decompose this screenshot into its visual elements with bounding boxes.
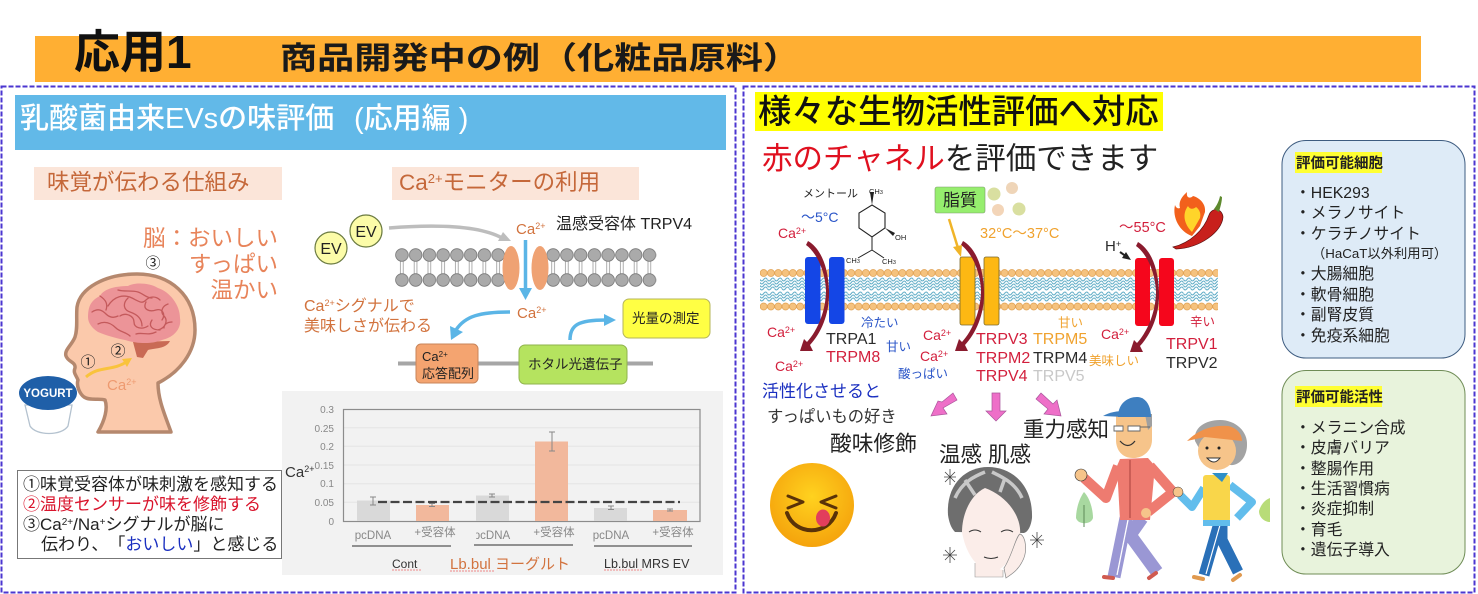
icon: EV particles <box>315 215 382 264</box>
cell list: ・メラノサイト <box>1295 205 1405 222</box>
chart: Ca response <box>282 391 723 589</box>
cold channel labels: 2+ <box>796 226 806 236</box>
icon: EV particles: EV <box>355 224 377 241</box>
subheading: Ca monitor: モニターの利用 <box>443 170 600 195</box>
title banner <box>35 26 1421 82</box>
receptor label: 温感受容体 TRPV4 <box>556 215 692 233</box>
icon: walking elderly couple <box>1075 397 1270 580</box>
hot channel labels: ～55°C <box>1119 220 1166 236</box>
box: evaluable cells <box>1282 140 1465 358</box>
chart group labels <box>392 556 690 572</box>
hot channel labels: Ca <box>1101 326 1119 342</box>
trees <box>1076 492 1270 527</box>
signal text: 2+ <box>324 298 335 308</box>
panel heading <box>15 95 726 150</box>
arrow: lipid to channel <box>949 219 962 257</box>
chart axis ticks: 0.3 <box>320 405 334 416</box>
warm channel labels: 32°C～37°C <box>980 226 1059 242</box>
warm channel labels: Ca <box>920 348 938 364</box>
text box: mechanism steps: /Na <box>73 515 100 534</box>
icon: head with brain <box>66 274 195 432</box>
Ca2+ above channel: Ca <box>516 221 535 238</box>
icon: menthol structure <box>846 187 906 266</box>
subheading: taste mechanism <box>34 167 282 200</box>
activation text: 活性化させると <box>762 382 881 401</box>
hot channel labels: H <box>1105 238 1116 255</box>
brain taste words: すっぱい <box>189 252 278 277</box>
cell list: ・大腸細胞 <box>1295 265 1374 283</box>
box: evaluable activities <box>1282 370 1465 574</box>
hot channel labels: TRPV2 <box>1166 355 1218 372</box>
cold channel labels: Ca <box>775 358 793 374</box>
activation text: 酸味修飾 <box>830 431 917 456</box>
box: response element: 応答配列 <box>422 366 474 381</box>
cell list: ・HEK293 <box>1295 185 1370 202</box>
icon: menthol structure: CH3 <box>869 187 883 196</box>
chart axis ticks: 0.1 <box>320 479 334 490</box>
text box: mechanism steps: シグナルが脳に <box>105 515 224 534</box>
cell list: ・ケラチノサイト <box>1295 225 1421 243</box>
warm channel labels <box>898 226 1087 385</box>
numbered markers on head <box>80 255 161 371</box>
lipid callout: 脂質 <box>943 191 977 210</box>
cold channel labels <box>767 188 911 374</box>
lipid callout <box>935 182 1026 216</box>
cold channel labels: メントール <box>803 188 858 200</box>
chart category labels: pcDNA <box>593 530 630 542</box>
activity list: ・整腸作用 <box>1295 460 1374 478</box>
box title: 評価可能活性 <box>1296 388 1383 406</box>
box: response element: Ca <box>422 349 439 364</box>
box: response element <box>416 344 478 383</box>
gene construct <box>398 344 653 384</box>
signal text: Ca <box>304 298 324 315</box>
icon: menthol structure: CH3 <box>882 257 896 266</box>
text box: mechanism steps: ②温度センサーが味を修飾する <box>23 495 261 514</box>
chart group labels: Lb.bul MRS EV <box>604 557 690 571</box>
text box: mechanism steps: ①味覚受容体が味刺激を感知する <box>23 475 278 494</box>
activation text: すっぱいもの好き <box>767 408 897 426</box>
cold channel labels: TRPA1 <box>826 331 876 348</box>
chart axis ticks <box>315 405 334 528</box>
gravity label: 重力感知 <box>1023 418 1109 442</box>
subheading: taste mechanism: 味覚が伝わる仕組み <box>47 170 250 195</box>
title: application number: 応用1 <box>74 26 192 78</box>
signal text: 美味しさが伝わる <box>304 317 432 335</box>
chart category labels: +受容体 <box>533 525 575 539</box>
cold channel labels: Ca <box>778 225 796 241</box>
activity list: ・炎症抑制 <box>1295 500 1374 518</box>
activity list: ・育毛 <box>1295 521 1343 539</box>
box title: 評価可能細胞 <box>1296 154 1383 172</box>
arrow: to luminescence <box>570 314 616 340</box>
subheading: Ca monitor: Ca <box>399 170 428 195</box>
hot channel labels: 辛い <box>1190 315 1215 329</box>
hot channel labels: TRPV1 <box>1166 336 1218 353</box>
cell list <box>1295 185 1447 345</box>
warm channel labels: TRPM5 <box>1033 331 1087 348</box>
activity list: ・生活習慣病 <box>1295 480 1390 498</box>
cold channel labels: 2+ <box>793 359 803 369</box>
cell list: ・副腎皮質 <box>1295 306 1374 324</box>
numbered markers on head: ① <box>80 354 96 371</box>
brain taste words: 脳：おいしい <box>143 226 278 251</box>
icon: yogurt cup: YOGURT <box>23 388 73 400</box>
arrow: EV to receptor <box>389 226 511 241</box>
chart axis label: 2+ <box>304 464 314 474</box>
cold channel labels: ～5°C <box>801 209 838 225</box>
text box: mechanism steps: 2+ <box>62 517 73 528</box>
chart category labels <box>355 525 694 542</box>
warm channel labels: 甘い <box>1058 316 1083 330</box>
cell list: （HaCaT以外利用可） <box>1312 246 1447 261</box>
hot channel labels: 2+ <box>1119 327 1129 337</box>
chart axis ticks: 0.25 <box>315 424 334 435</box>
Ca2+ below channel: 2+ <box>536 305 546 315</box>
box: response element: 2+ <box>439 350 448 359</box>
signal text: シグナルで <box>335 297 415 315</box>
chart axis ticks: 0.05 <box>315 498 334 509</box>
warm channel labels: 2+ <box>938 349 948 359</box>
panel: taste evaluation <box>2 86 736 592</box>
numbered markers on head: ③ <box>145 255 161 272</box>
activity list: ・皮膚バリア <box>1295 439 1390 457</box>
chart category labels: pcDNA <box>355 530 392 542</box>
title: subtitle: 商品開発中の例（化粧品原料） <box>280 41 800 76</box>
icon: head with brain: 2+ <box>126 377 136 387</box>
arrow: to response element <box>450 312 510 340</box>
lipid bilayer with channel <box>395 246 656 290</box>
subheading: red channel: 赤のチャネルを評価できます <box>762 142 1158 176</box>
hot channel labels <box>1089 220 1218 372</box>
subheading: Ca monitor <box>392 167 639 200</box>
arrow: taste signal <box>86 361 128 377</box>
icon: yogurt cup <box>19 376 77 434</box>
channel: warm <box>955 241 999 351</box>
cold channel labels: 甘い <box>886 340 911 354</box>
icon: EV particles: EV <box>320 241 342 258</box>
box: luminescence measurement: 光量の測定 <box>632 311 700 326</box>
warm channel labels: TRPM2 <box>976 350 1030 367</box>
chart group labels: EVs <box>450 572 478 589</box>
activity list: ・遺伝子導入 <box>1295 540 1390 559</box>
warm channel labels: Ca <box>923 327 941 343</box>
panel heading: (応用編 ) <box>354 102 468 135</box>
icon: head with brain: Ca <box>107 377 126 394</box>
chart axis ticks: 0.15 <box>315 461 334 472</box>
numbered markers on head: ② <box>110 343 126 360</box>
hot channel labels: 美味しい <box>1089 354 1139 368</box>
activation text <box>762 382 917 456</box>
text box: mechanism steps: + <box>100 517 106 528</box>
brain taste words: 温かい <box>210 278 278 303</box>
cell list: ・免疫系細胞 <box>1295 327 1390 345</box>
subheading: Ca monitor: 2+ <box>428 171 443 186</box>
icon: yummy emoji <box>770 463 854 547</box>
hot channel labels: + <box>1116 239 1121 249</box>
cell membrane <box>760 269 1218 311</box>
chart category labels: +受容体 <box>652 525 694 539</box>
chart group labels: Lb.bul ヨーグルト <box>450 556 570 573</box>
brain taste words <box>143 226 278 303</box>
chart axis label: Ca <box>285 464 304 481</box>
panel: bioactivity evaluation <box>744 86 1474 592</box>
box: luciferase gene: ホタル光遺伝子 <box>528 357 622 372</box>
chart baseline dashed <box>378 501 680 503</box>
box: luciferase gene <box>519 345 627 384</box>
chart category labels: +受容体 <box>414 525 456 539</box>
text box: mechanism steps <box>18 470 282 558</box>
activity list <box>1295 419 1406 559</box>
warmth label: 温感 肌感 <box>939 443 1031 467</box>
panel heading: 様々な生物活性評価へ対応 <box>758 94 1159 131</box>
effect arrows <box>931 393 1061 421</box>
cold channel labels: 冷たい <box>861 316 899 330</box>
warm channel labels: 2+ <box>941 328 951 338</box>
signal text <box>304 297 432 335</box>
channel: cold <box>800 241 844 351</box>
channel: hot <box>1130 242 1174 352</box>
activity list: ・メラニン合成 <box>1295 419 1406 437</box>
Ca2+ above channel: 2+ <box>535 221 545 231</box>
chart bars <box>357 432 687 521</box>
icon: chili and flame <box>1173 192 1223 249</box>
warm channel labels: TRPM4 <box>1033 350 1087 367</box>
text box: mechanism steps: ③Ca <box>23 515 62 534</box>
icon: menthol structure: CH3 <box>846 256 860 265</box>
text box: mechanism steps: 伝わり、「おいしい」と感じる <box>41 535 278 554</box>
chart axis ticks: 0.2 <box>320 442 334 453</box>
warm channel labels: TRPV3 <box>976 331 1028 348</box>
icon: woman's face <box>943 467 1044 578</box>
warm channel labels: TRPV4 <box>976 368 1028 385</box>
elderly man <box>1075 397 1173 578</box>
arrow: Ca2+ influx <box>519 240 532 300</box>
icon: menthol structure: OH <box>895 233 906 242</box>
cold channel labels: 2+ <box>785 325 795 335</box>
chart group labels: Cont <box>392 557 418 571</box>
elderly woman <box>1173 420 1252 580</box>
chart category labels: pcDNA <box>474 530 511 542</box>
cold channel labels: TRPM8 <box>826 349 880 366</box>
Ca2+ below channel: Ca <box>517 305 536 322</box>
box: luminescence measurement <box>623 299 710 338</box>
warm channel labels: TRPV5 <box>1033 368 1085 385</box>
panel heading: 乳酸菌由来EVsの味評価 <box>20 103 334 135</box>
icon: brain <box>88 284 180 358</box>
warm channel labels: 酸っぱい <box>898 366 948 381</box>
chart axis ticks: 0 <box>328 517 334 528</box>
cell list: ・軟骨細胞 <box>1295 286 1374 304</box>
cold channel labels: Ca <box>767 324 785 340</box>
